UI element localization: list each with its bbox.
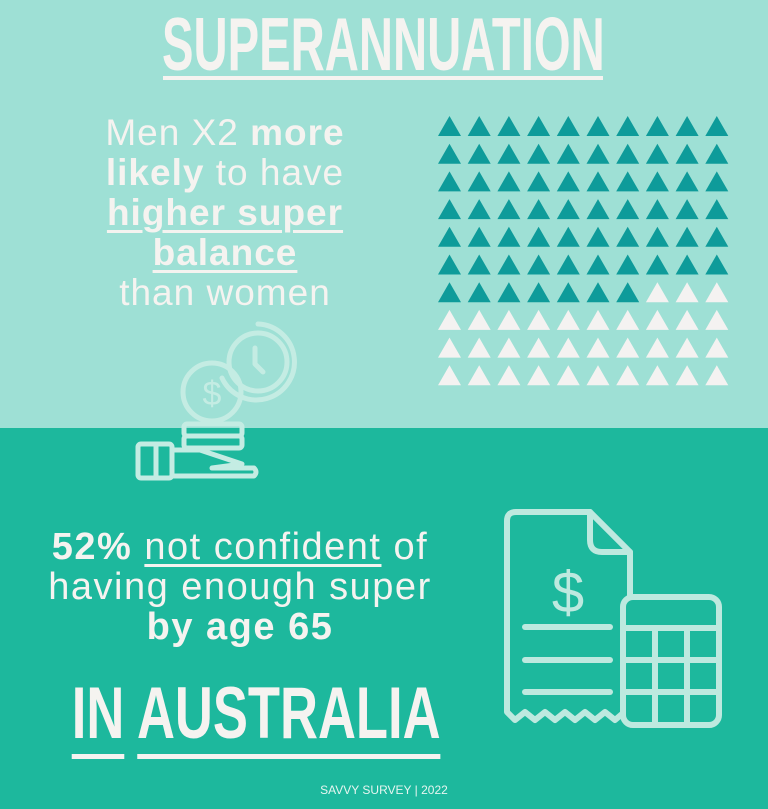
footer: SAVVY SURVEY | 2022 — [320, 783, 448, 797]
text: men more likely — [105, 112, 345, 313]
title: SUPERANNUATION — [162, 2, 604, 86]
icon: coins and clock on hand — [136, 322, 297, 480]
text: 52% not confident — [48, 526, 432, 648]
heading: in australia: IN AUSTRALIA — [72, 673, 441, 754]
text: men more likely: balance — [153, 232, 297, 273]
text: men more likely: likely to have — [106, 152, 344, 193]
icon: receipt and calculator: $ — [552, 560, 584, 625]
text: men more likely: higher super — [107, 192, 343, 233]
text: men more likely: Men X2 more — [105, 112, 345, 153]
icon: coins and clock on hand: $ — [203, 375, 222, 413]
chart: triangle grid (67 of 100 dark) — [438, 116, 728, 386]
text: 52% not confident: by age 65 — [147, 606, 333, 648]
icon: receipt and calculator — [504, 509, 722, 728]
text: men more likely: than women — [119, 272, 331, 313]
text: 52% not confident: 52% not confident of — [52, 526, 428, 568]
text: 52% not confident: having enough super — [48, 566, 432, 608]
